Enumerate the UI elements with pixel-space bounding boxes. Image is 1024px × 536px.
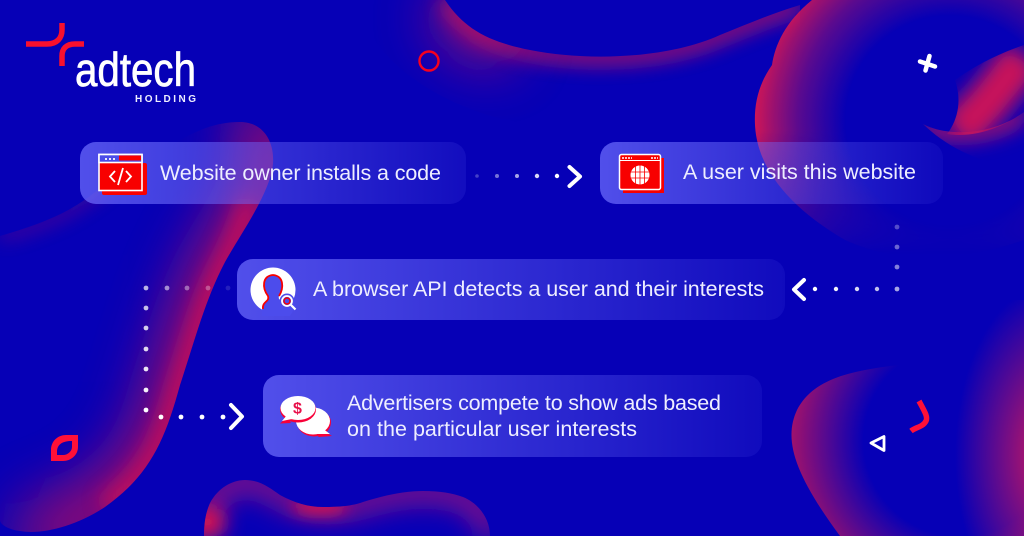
logo mark	[26, 23, 84, 66]
panel: website owner	[80, 142, 466, 204]
blob: top	[445, 0, 800, 57]
decorative shape: red ring	[420, 52, 438, 70]
icon: chat bubbles: $	[293, 400, 302, 418]
icon: globe window	[620, 154, 664, 193]
label: Advertisers compete to show ads based	[347, 391, 721, 415]
arrow: owner to user	[475, 167, 580, 186]
panel background	[80, 142, 466, 204]
logo wordmark: adtech	[75, 43, 196, 96]
blob: bottom centre	[188, 480, 490, 536]
panel: user visits	[600, 142, 943, 204]
panel background	[263, 375, 762, 457]
icon: chat bubbles	[280, 396, 332, 437]
decorative shape: red leaf	[51, 435, 78, 461]
blob: left	[0, 122, 273, 532]
arrow: user to browser api	[794, 225, 899, 299]
logo subtitle: HOLDING	[135, 94, 196, 105]
blob: bottom right	[791, 300, 1024, 536]
label: A user visits this website	[683, 160, 916, 184]
decorative shape: white cross	[920, 56, 935, 70]
icon: user search	[250, 268, 296, 316]
blob: top right	[755, 0, 1024, 258]
logo	[26, 23, 196, 105]
panel background	[600, 142, 943, 204]
arrow: browser api to advertisers	[144, 286, 242, 428]
panel: browser api	[237, 259, 785, 320]
panel: advertisers	[263, 375, 762, 457]
icon: code window	[99, 154, 147, 195]
panel background	[237, 259, 785, 320]
label: Website owner installs a code	[160, 161, 441, 185]
decorative shape: white triangle	[871, 436, 884, 450]
label: A browser API detects a user and their interests	[313, 277, 764, 301]
blob: right swirl	[923, 55, 1024, 134]
decorative shape: red hook	[911, 401, 927, 431]
label: on the particular user interests	[347, 417, 637, 441]
